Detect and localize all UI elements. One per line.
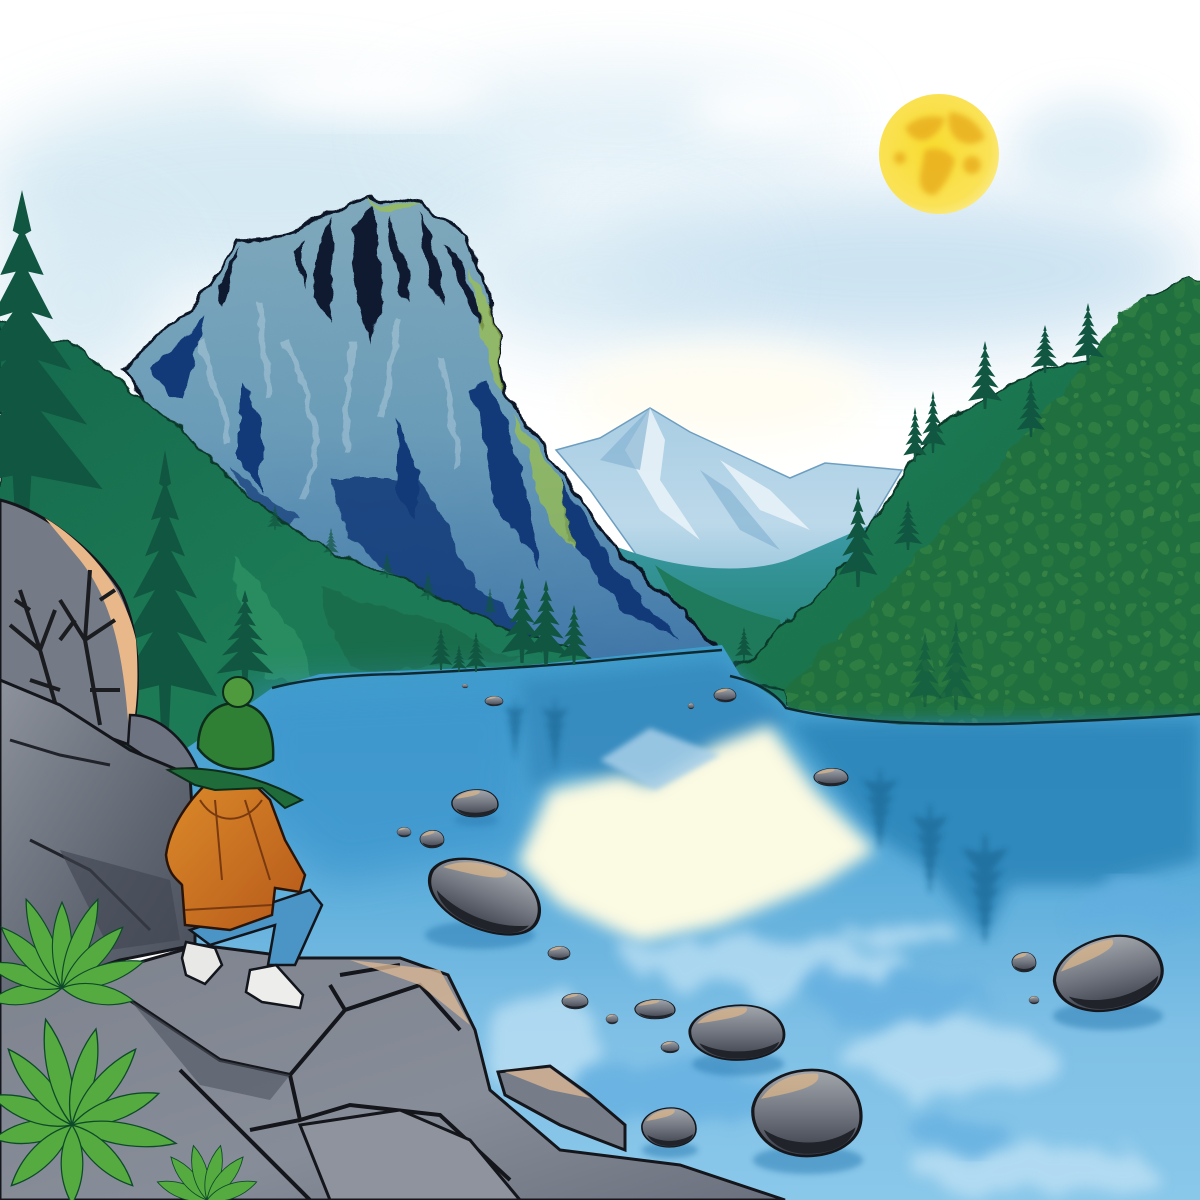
foreground: small rock behind figure (128, 715, 197, 770)
figure: back shoe (182, 942, 222, 984)
shoreline (272, 650, 1200, 724)
figure: jacket (166, 780, 305, 930)
water: left deep blue (250, 680, 530, 880)
figure: scarf (168, 768, 302, 808)
left green hill (0, 320, 590, 770)
foreground: lower right rock (498, 1066, 625, 1150)
tree group: right ridge (838, 303, 1104, 710)
foreground: left boulder with bare branches (0, 500, 137, 745)
figure: jeans (190, 890, 322, 965)
far valley hills (600, 525, 870, 710)
plants: bottom left foliage (0, 896, 259, 1200)
tree: small left (216, 590, 274, 685)
tree: tall left (0, 190, 103, 530)
figure: pompom (223, 677, 253, 707)
water: tree reflections (505, 700, 1008, 945)
moon (879, 94, 999, 214)
mountain moss highlights (365, 200, 575, 550)
foreground: rock ledge (0, 945, 785, 1200)
water: sky reflection (518, 725, 875, 942)
conifer trees (0, 190, 1104, 730)
rock shadows (425, 814, 1163, 1174)
water: lower cloud reflections (485, 916, 1160, 1192)
foreground: grey cliff (0, 680, 195, 1000)
tree: mid left (113, 450, 217, 730)
main mountain (122, 197, 720, 668)
mountain dark crevices (150, 315, 680, 640)
water: mountain reflection (520, 660, 790, 800)
figure: hat (198, 703, 273, 769)
distant mountain (556, 408, 902, 600)
figure: front shoe (246, 965, 303, 1008)
plant: small (155, 1144, 259, 1200)
lake water (170, 645, 1200, 1200)
sky watercolor wash (0, 68, 1200, 445)
water: right deep blue (790, 720, 1200, 940)
plant: upper (0, 896, 147, 1010)
plant: lower (0, 1017, 178, 1200)
figure: seated person in orange jacket (166, 677, 322, 1008)
tree group: lakeside (267, 505, 753, 672)
right green hills (725, 278, 1200, 740)
water rocks (397, 684, 1169, 1174)
